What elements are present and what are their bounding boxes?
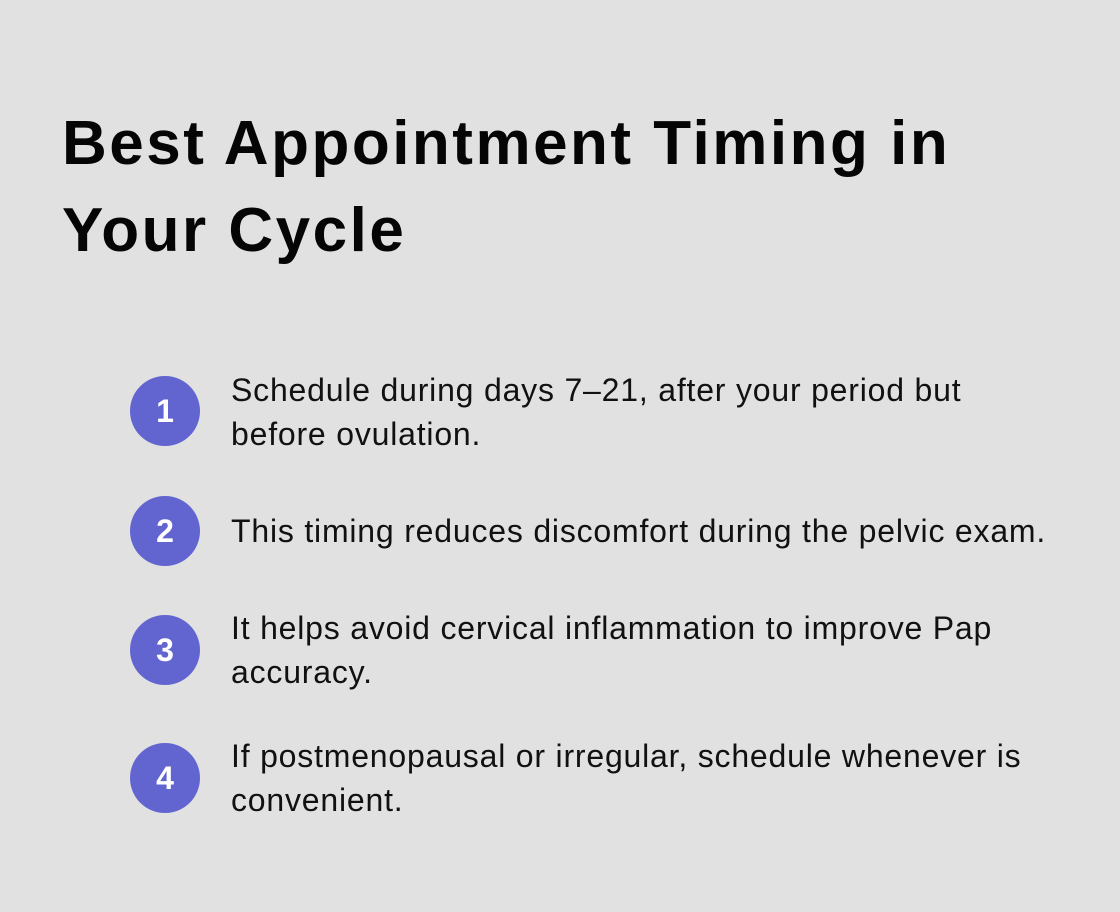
text 3 [231,610,992,690]
badge 2: 2 [156,513,174,549]
title: Your Cycle [62,196,406,265]
text 4 [231,738,1021,818]
badge 3: 3 [156,632,174,668]
badge 2 [130,496,200,566]
item 1 [130,372,961,452]
title: Best Appointment Timing in [62,109,950,178]
title [62,109,950,265]
item 2 [130,496,1046,566]
badge 3 [130,615,200,685]
badge 4 [130,743,200,813]
badge 4: 4 [156,760,174,796]
text 1: before ovulation. [231,416,481,452]
text 2: This timing reduces discomfort during the pelvic exam. [231,513,1046,549]
text 4: convenient. [231,782,403,818]
text 3: It helps avoid cervical inflammation to improve Pap [231,610,992,646]
badge 1 [130,376,200,446]
item 3 [130,610,992,690]
text 4: If postmenopausal or irregular, schedule whenever is [231,738,1021,774]
badge 1: 1 [156,393,174,429]
text 1 [231,372,961,452]
text 3: accuracy. [231,654,373,690]
text 1: Schedule during days 7–21, after your period but [231,372,961,408]
item 4 [130,738,1021,818]
